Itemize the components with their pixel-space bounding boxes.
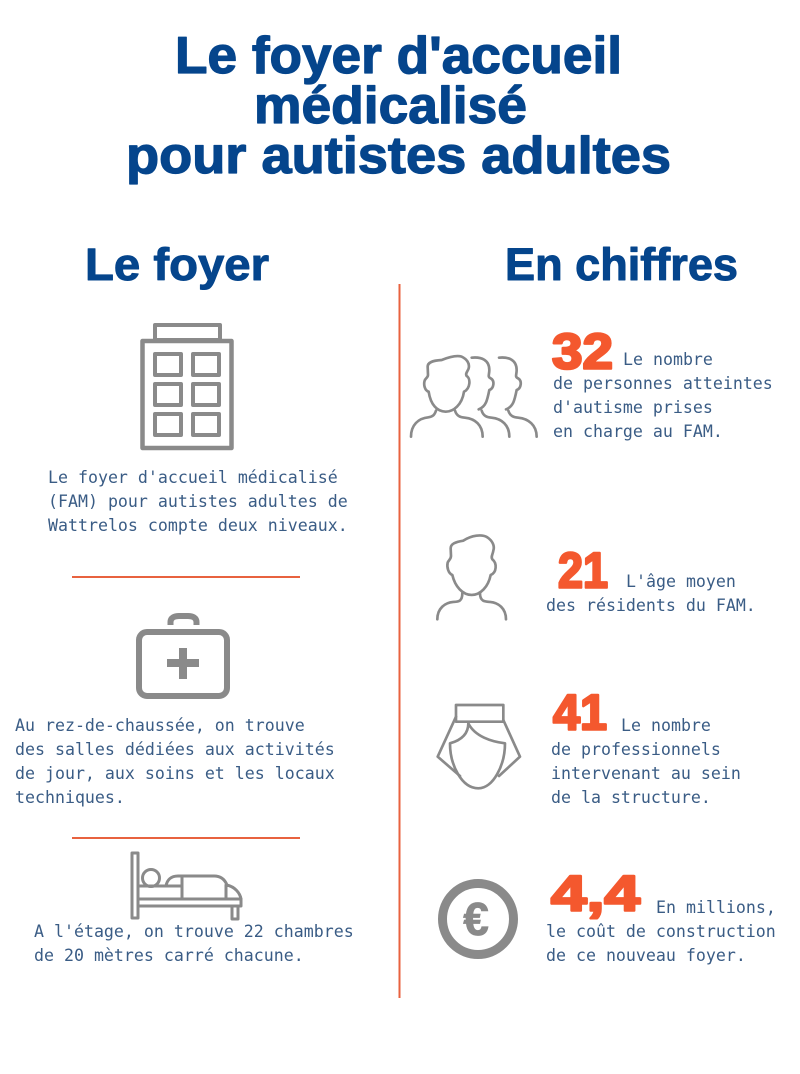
text: ground floor: de jour, aux soins et les locaux xyxy=(15,764,335,783)
stat: 21: 21 xyxy=(558,542,608,598)
stat: 32: d'autisme prises xyxy=(553,398,713,417)
stat: 4,4: le coût de construction xyxy=(546,922,776,941)
stat: 41 xyxy=(551,684,741,807)
text: description of the home xyxy=(48,468,348,535)
stat: 41: 41 xyxy=(553,684,607,740)
icon: building xyxy=(142,325,232,448)
stat: 32: de personnes atteintes xyxy=(553,374,773,393)
stat: 41: intervenant au sein xyxy=(551,764,741,783)
text: ground floor xyxy=(15,716,335,807)
stat: 4,4: 4,4 xyxy=(551,866,640,922)
stat: 32 xyxy=(552,324,773,441)
stat: 21: des résidents du FAM. xyxy=(546,596,756,615)
stat: 32: Le nombre xyxy=(623,350,713,369)
stat: 41: de professionnels xyxy=(551,740,721,759)
text: ground floor: des salles dédiées aux activités xyxy=(15,740,335,759)
stat: 32: 32 xyxy=(552,324,613,380)
stat: 4,4: En millions, xyxy=(656,898,776,917)
icon: euro: € xyxy=(463,893,489,945)
text: ground floor: Au rez-de-chaussée, on trouve xyxy=(15,716,305,735)
stat: 21 xyxy=(546,542,756,615)
title: Le foyer d'accueil xyxy=(175,27,622,85)
text: description of the home: Wattrelos compte deux niveaux. xyxy=(48,516,348,535)
icon: bed xyxy=(132,853,241,919)
text: upper floor xyxy=(34,922,354,965)
stat: 4,4: de ce nouveau foyer. xyxy=(546,946,746,965)
title xyxy=(126,27,671,185)
text: upper floor: A l'étage, on trouve 22 chambres xyxy=(34,922,354,941)
panel: En chiffres xyxy=(411,324,776,965)
icon: three people xyxy=(411,356,537,437)
heading: Le foyer: Le foyer xyxy=(85,239,269,290)
stat: 41: de la structure. xyxy=(551,788,711,807)
text: ground floor: techniques. xyxy=(15,788,125,807)
icon: euro xyxy=(442,884,514,954)
icon: nurse xyxy=(438,705,520,788)
icon: person xyxy=(437,535,506,619)
stat: 4,4 xyxy=(546,866,776,965)
stat: 32: en charge au FAM. xyxy=(553,422,723,441)
text: upper floor: de 20 mètres carré chacune. xyxy=(34,946,304,965)
icon: medical kit xyxy=(139,616,227,696)
title: pour autistes adultes xyxy=(126,127,671,185)
text: description of the home: (FAM) pour autistes adultes de xyxy=(48,492,348,511)
text: description of the home: Le foyer d'accueil médicalisé xyxy=(48,468,338,487)
stat: 21: L'âge moyen xyxy=(626,572,736,591)
title: médicalisé xyxy=(254,77,527,135)
stat: 41: Le nombre xyxy=(621,716,711,735)
heading: En chiffres: En chiffres xyxy=(505,239,738,290)
panel: Le foyer xyxy=(15,325,354,965)
